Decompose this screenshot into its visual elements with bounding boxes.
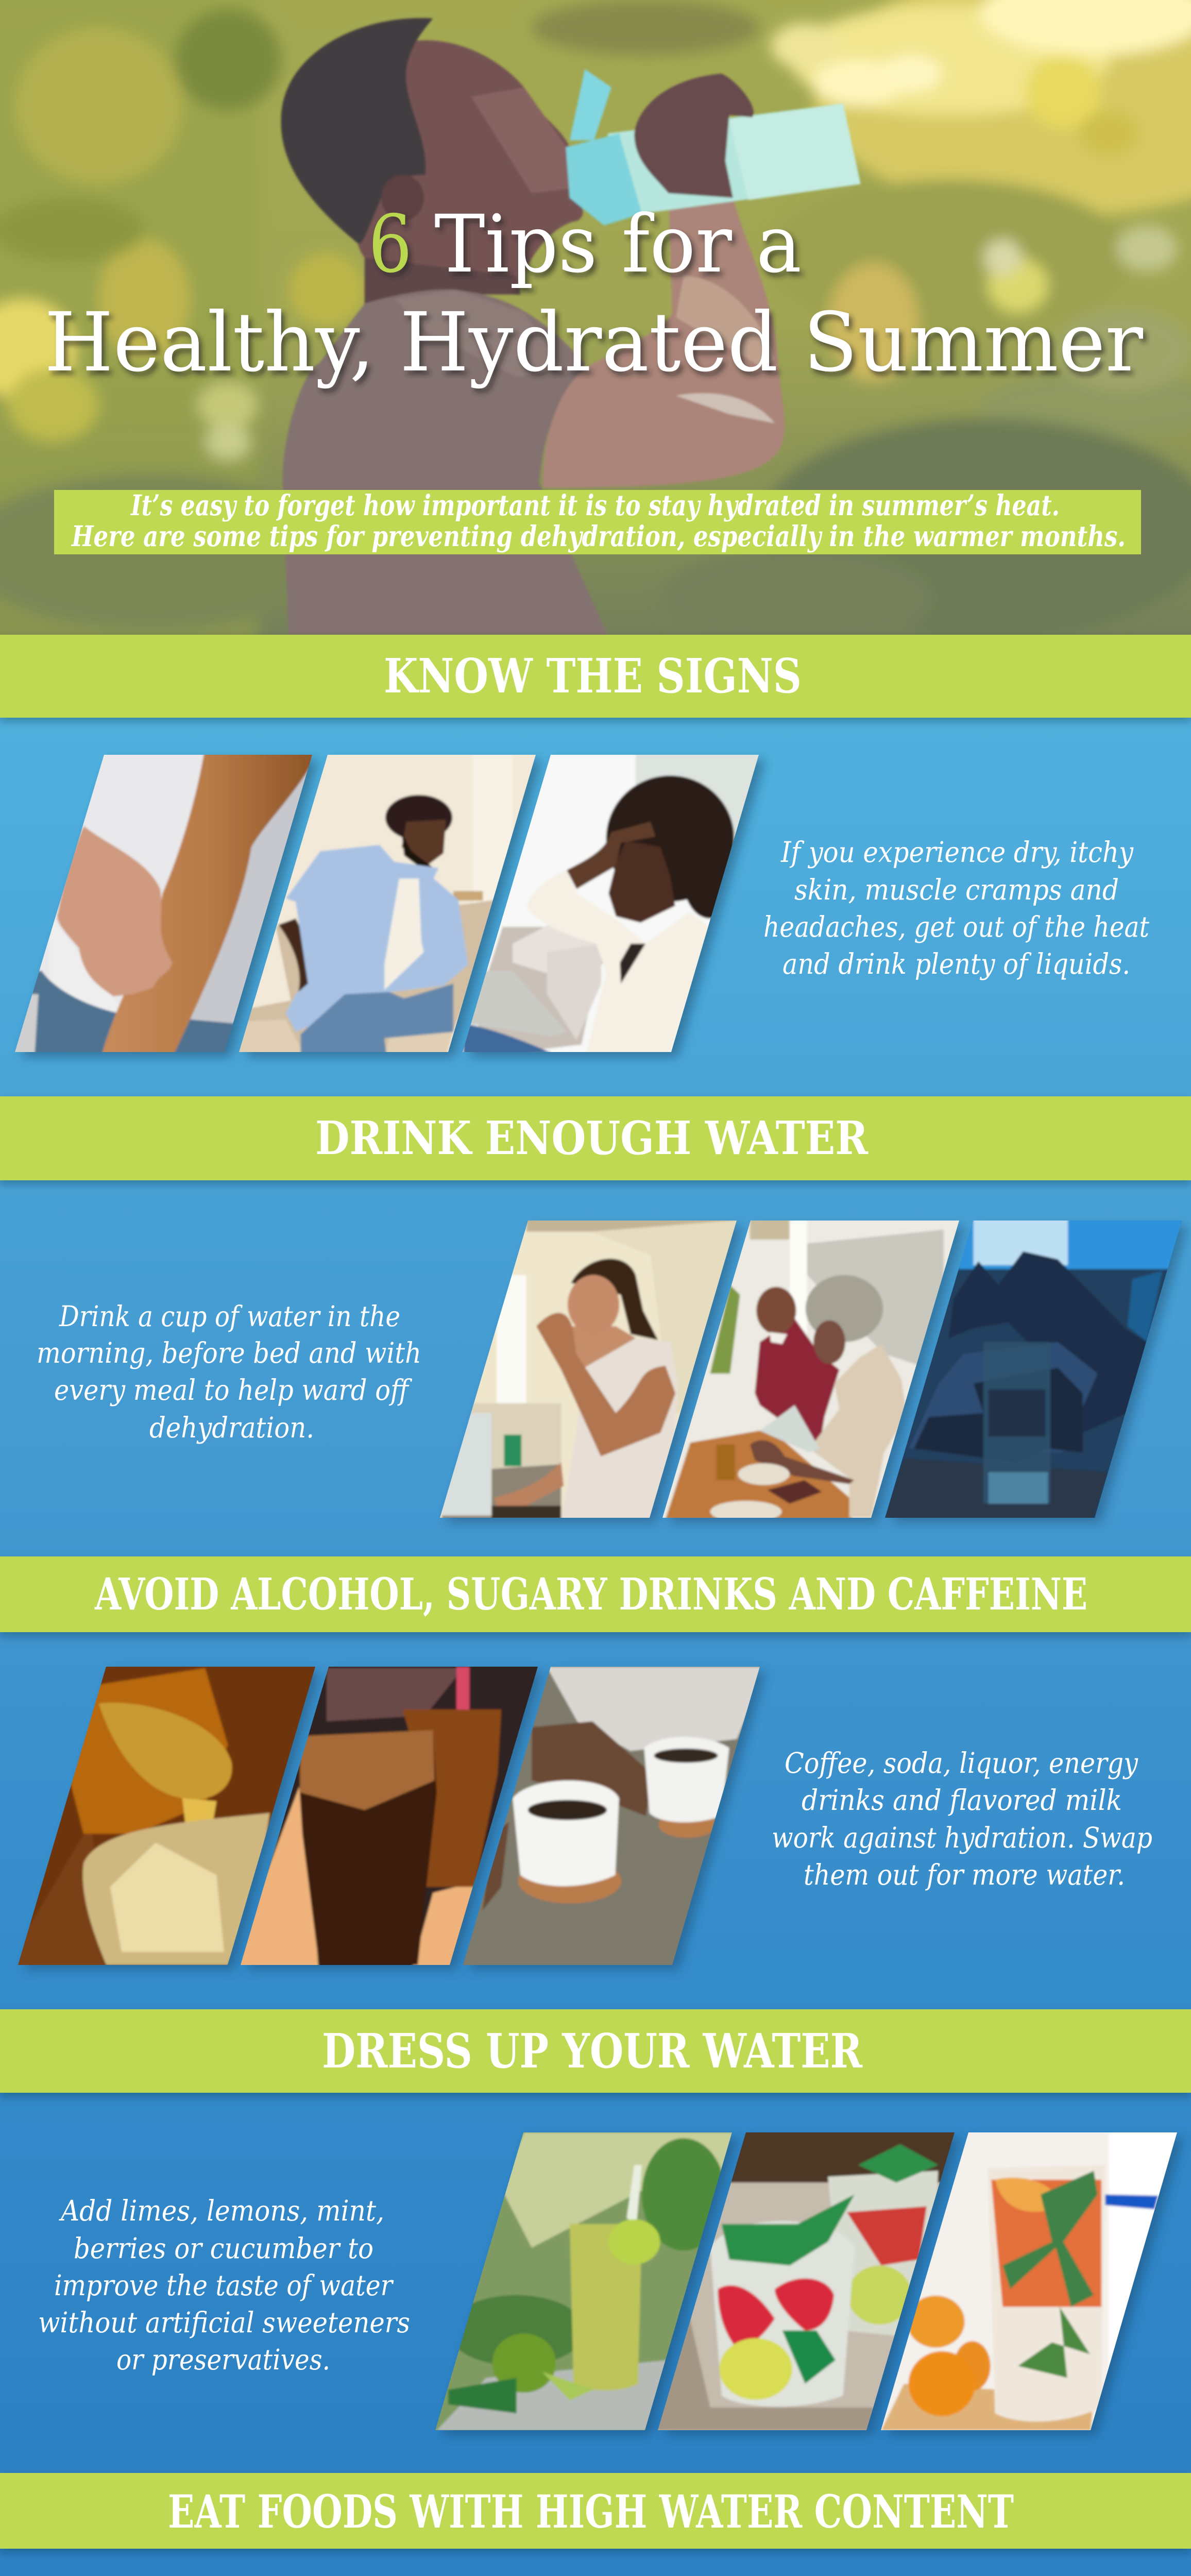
hero photo: man drinking from water bottle bbox=[0, 0, 1191, 649]
text: avoid alcohol: work against hydration. Swap bbox=[772, 1821, 1152, 1854]
text: know the signs: and drink plenty of liquids. bbox=[782, 947, 1130, 980]
text: dress up your water: or preservatives. bbox=[116, 2343, 330, 2376]
text: drink enough water: Drink a cup of water in the bbox=[59, 1300, 400, 1333]
text: know the signs: If you experience dry, itchy bbox=[780, 836, 1134, 869]
heading: dress up your water: DRESS UP YOUR WATER bbox=[322, 2023, 862, 2079]
text: drink enough water: every meal to help ward off bbox=[54, 1374, 412, 1406]
title: 6 bbox=[368, 198, 412, 291]
text: drink enough water: dehydration. bbox=[149, 1411, 314, 1444]
arm bbox=[543, 193, 785, 488]
neck and face bbox=[356, 40, 583, 299]
text: drink enough water: morning, before bed and with bbox=[37, 1336, 421, 1369]
photo: woman drinking water bbox=[432, 1218, 745, 1523]
text: dress up your water: Add limes, lemons, mint, bbox=[58, 2194, 384, 2227]
text: dress up your water: improve the taste of water bbox=[54, 2269, 394, 2302]
photo: coffee mugs bbox=[456, 1656, 775, 1976]
photo: man with back pain bbox=[232, 750, 552, 1057]
text: drink enough water bbox=[37, 1300, 421, 1444]
photo: strawberry and lime water jars bbox=[645, 2124, 965, 2437]
title bbox=[44, 198, 1143, 390]
text: avoid alcohol: drinks and flavored milk bbox=[802, 1784, 1122, 1817]
photo: hand holding glass at bedside bbox=[879, 1218, 1191, 1523]
bottle bbox=[608, 104, 861, 216]
heading: eat foods with high water content bbox=[0, 2473, 1191, 2549]
heading: drink enough water bbox=[0, 1096, 1191, 1180]
text: dress up your water: berries or cucumber to bbox=[74, 2232, 373, 2265]
text: avoid alcohol: Coffee, soda, liquor, energy bbox=[785, 1747, 1138, 1780]
shirt bbox=[282, 290, 608, 635]
photo: whiskey poured over ice bbox=[0, 1656, 334, 1976]
photo: scratching itchy arm bbox=[0, 750, 335, 1057]
text: know the signs: skin, muscle cramps and bbox=[794, 873, 1119, 906]
hand bbox=[634, 74, 754, 198]
text: avoid alcohol bbox=[772, 1747, 1152, 1891]
photo: couple preparing a meal bbox=[656, 1218, 968, 1523]
heading: avoid alcohol, sugary drinks and caffeine bbox=[0, 1556, 1191, 1632]
text: know the signs bbox=[763, 836, 1150, 980]
title: Healthy, Hydrated Summer bbox=[44, 295, 1143, 390]
photo: lime mojito bbox=[426, 2124, 744, 2437]
heading: dress up your water bbox=[0, 2009, 1191, 2093]
text: avoid alcohol: them out for more water. bbox=[804, 1858, 1125, 1891]
text: dress up your water bbox=[38, 2194, 410, 2376]
intro callout bbox=[54, 488, 1141, 554]
heading: drink enough water: DRINK ENOUGH WATER bbox=[315, 1111, 869, 1165]
photo: iced cola glasses bbox=[228, 1656, 547, 1976]
text: know the signs: headaches, get out of the heat bbox=[763, 910, 1150, 943]
photo: citrus infused water pitcher bbox=[866, 2124, 1191, 2437]
heading: know the signs bbox=[0, 635, 1191, 718]
heading: know the signs: KNOW THE SIGNS bbox=[384, 648, 802, 704]
photo: woman with headache bbox=[458, 750, 774, 1057]
title: Tips for a bbox=[434, 198, 802, 291]
text: dress up your water: without artificial sweeteners bbox=[38, 2306, 410, 2339]
